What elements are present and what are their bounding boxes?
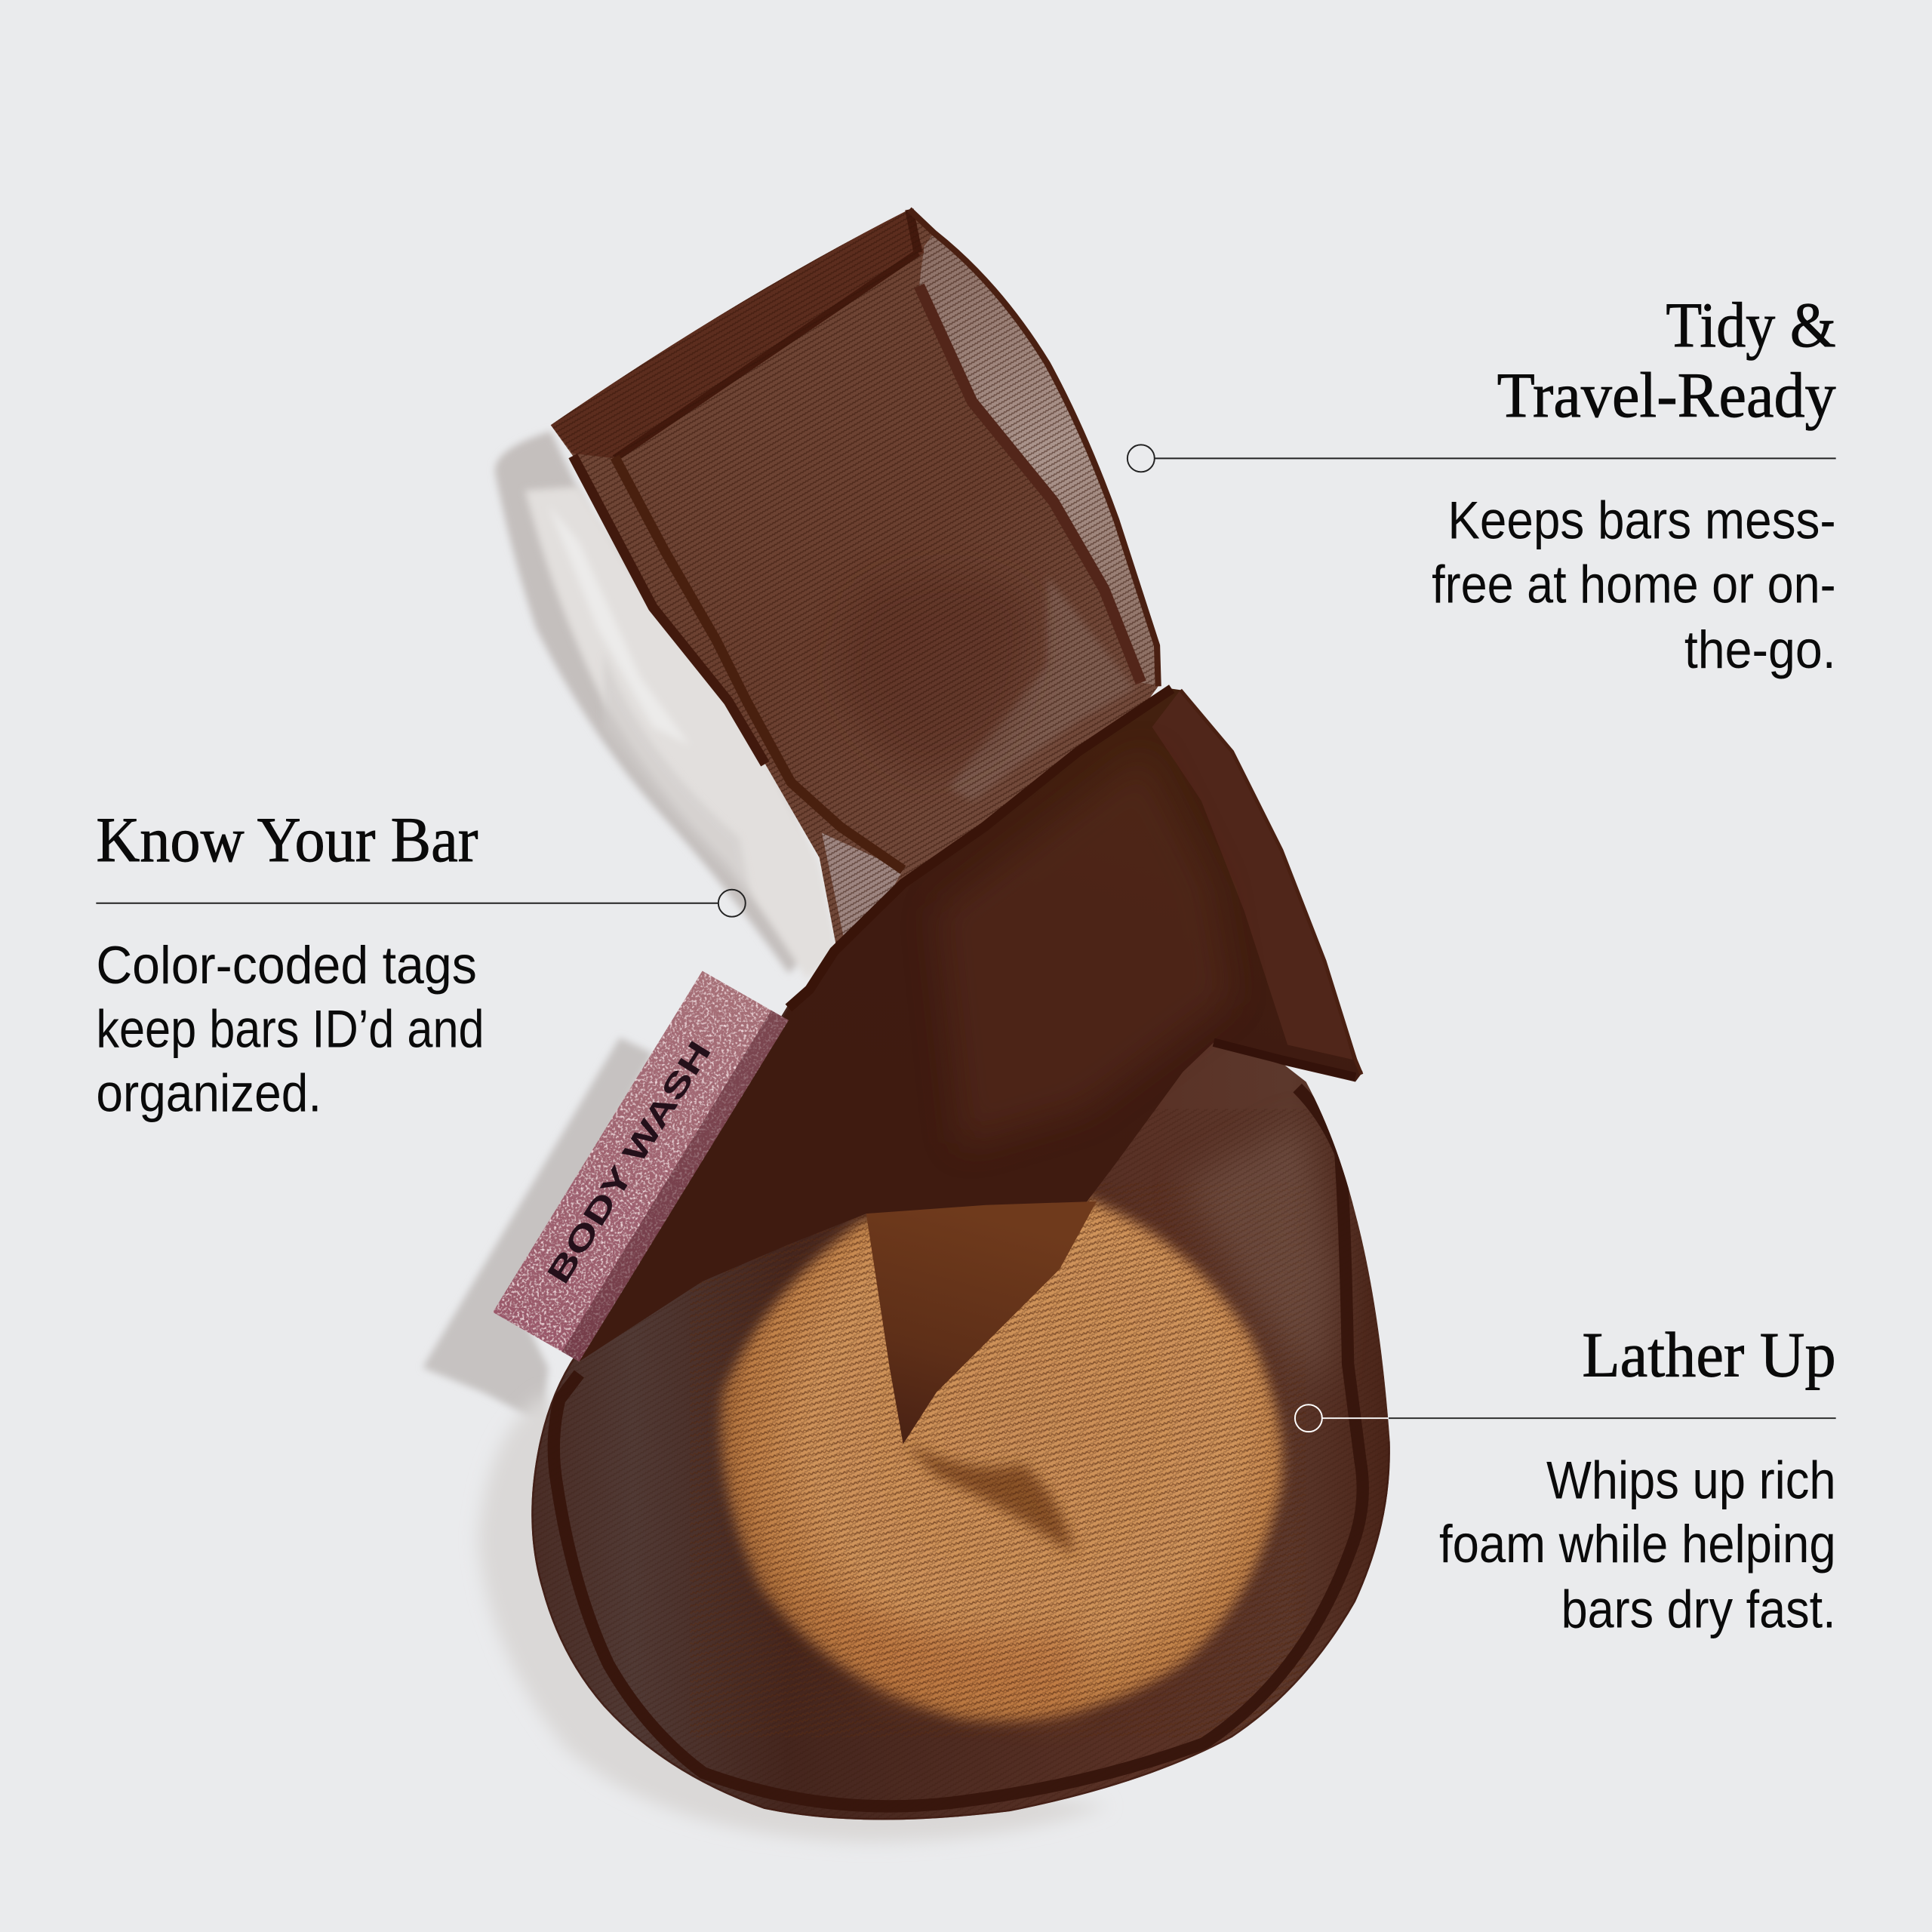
strap top hem — [551, 210, 924, 458]
description: the-go. — [1684, 620, 1836, 679]
band top seam — [789, 689, 1172, 1008]
description: organized. — [96, 1063, 321, 1123]
description — [1439, 1450, 1836, 1639]
pointer line — [1128, 445, 1836, 472]
callout: tidy and travel-ready — [1128, 290, 1836, 679]
heading: Lather Up — [1582, 1320, 1836, 1391]
cast shadows — [423, 431, 1109, 1842]
tag label: BODY WASH — [540, 1035, 718, 1290]
callout: know your bar — [96, 804, 746, 1123]
band sheer highlight — [937, 752, 1232, 1146]
folded dark band — [579, 689, 1363, 1361]
pointer line — [1295, 1404, 1836, 1432]
description: Keeps bars mess- — [1447, 490, 1836, 549]
description: foam while helping — [1439, 1514, 1836, 1574]
description: bars dry fast. — [1561, 1580, 1836, 1639]
heading: Know Your Bar — [96, 804, 478, 875]
strap darker fold — [838, 573, 1032, 777]
description: keep bars ID’d and — [96, 999, 485, 1059]
lower pouch with soap bar — [518, 986, 1404, 1848]
tag: body wash — [493, 971, 789, 1361]
strap lower sheer panel — [949, 577, 1135, 801]
description — [96, 935, 485, 1123]
product photo: soap bag — [423, 210, 1404, 1848]
strap mesh texture — [551, 210, 1158, 955]
soap bar crease — [848, 1443, 1081, 1725]
mesh texture over soap — [690, 1183, 1306, 1737]
pointer line — [96, 890, 746, 917]
pouch mesh — [531, 986, 1390, 1820]
pouch seam — [554, 1088, 1363, 1806]
heading: Tidy & — [1666, 290, 1836, 361]
band right sheer wing — [1152, 690, 1353, 1060]
soap bar — [721, 1198, 1282, 1721]
description: free at home or on- — [1432, 554, 1836, 614]
description: Whips up rich — [1546, 1450, 1836, 1509]
description: Color-coded tags — [96, 935, 477, 995]
inner wedge fold — [866, 1201, 1097, 1444]
heading — [1497, 290, 1836, 431]
strap seams — [615, 457, 903, 870]
pouch light patch — [1187, 1133, 1340, 1371]
description — [1432, 490, 1836, 679]
callout: lather up — [1295, 1320, 1836, 1639]
heading: Travel-Ready — [1497, 360, 1836, 431]
band end hem — [1214, 1042, 1355, 1077]
pouch outer edge shading — [531, 1349, 1390, 1820]
upper strap — [551, 210, 1158, 955]
strap right sheer panel — [919, 233, 1157, 685]
strap lower left sheer panel — [822, 833, 903, 939]
